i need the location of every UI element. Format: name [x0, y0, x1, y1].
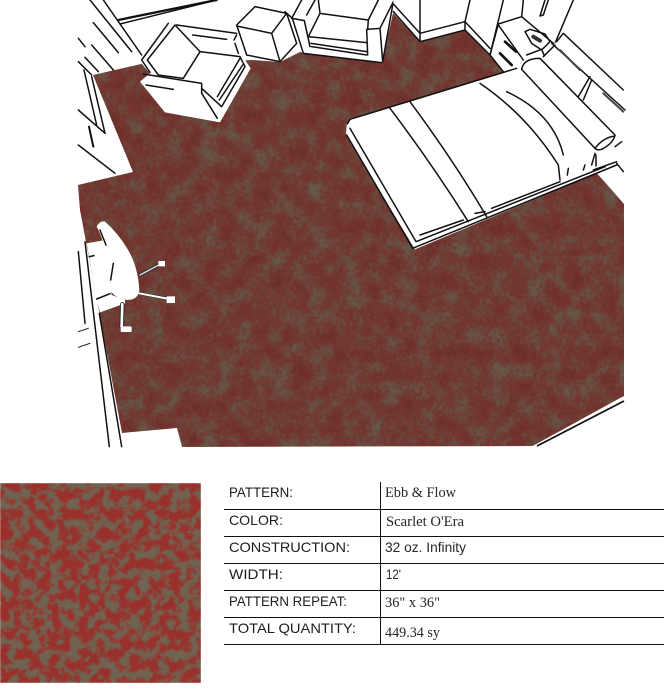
row: construction: 32 oz. Infinity [385, 539, 466, 555]
row: pattern repeat [229, 593, 440, 611]
nightstand details [490, 0, 573, 72]
wall and window lines [78, 0, 217, 173]
row: color: COLOR: [229, 512, 283, 528]
armchair top [285, 0, 393, 63]
bed [346, 58, 623, 249]
row: width: WIDTH: [229, 566, 283, 582]
armchair left [140, 23, 251, 122]
carpet swatch [0, 483, 201, 683]
row: construction: CONSTRUCTION: [229, 539, 350, 555]
row: total quantity [229, 620, 441, 641]
row: width [229, 566, 401, 582]
row: pattern [229, 484, 457, 501]
wardrobe and nightstand [393, 0, 573, 72]
row: construction [229, 539, 466, 555]
row: color [229, 512, 465, 530]
row: pattern repeat: PATTERN REPEAT: [229, 593, 347, 609]
row: pattern: PATTERN: [229, 484, 293, 500]
row: color: Scarlet O'Era [386, 514, 465, 530]
carpet floor [70, 0, 630, 450]
row: total quantity: TOTAL QUANTITY: [229, 620, 356, 636]
row: width: 12' [386, 566, 401, 582]
table rules [224, 482, 664, 644]
row: total quantity: 449.34 sy [385, 625, 441, 641]
side table cube [237, 7, 297, 62]
headboard [530, 33, 625, 180]
bolster pillow [522, 58, 615, 150]
desk chair [87, 221, 175, 332]
telephone on nightstand [525, 29, 550, 57]
room illustration [70, 0, 630, 450]
row: pattern: Ebb & Flow [385, 485, 457, 501]
baseboard line lower right [533, 397, 624, 447]
specification table [224, 482, 664, 644]
row: pattern repeat: 36" x 36" [385, 595, 440, 611]
wall strip at desk [78, 242, 122, 447]
